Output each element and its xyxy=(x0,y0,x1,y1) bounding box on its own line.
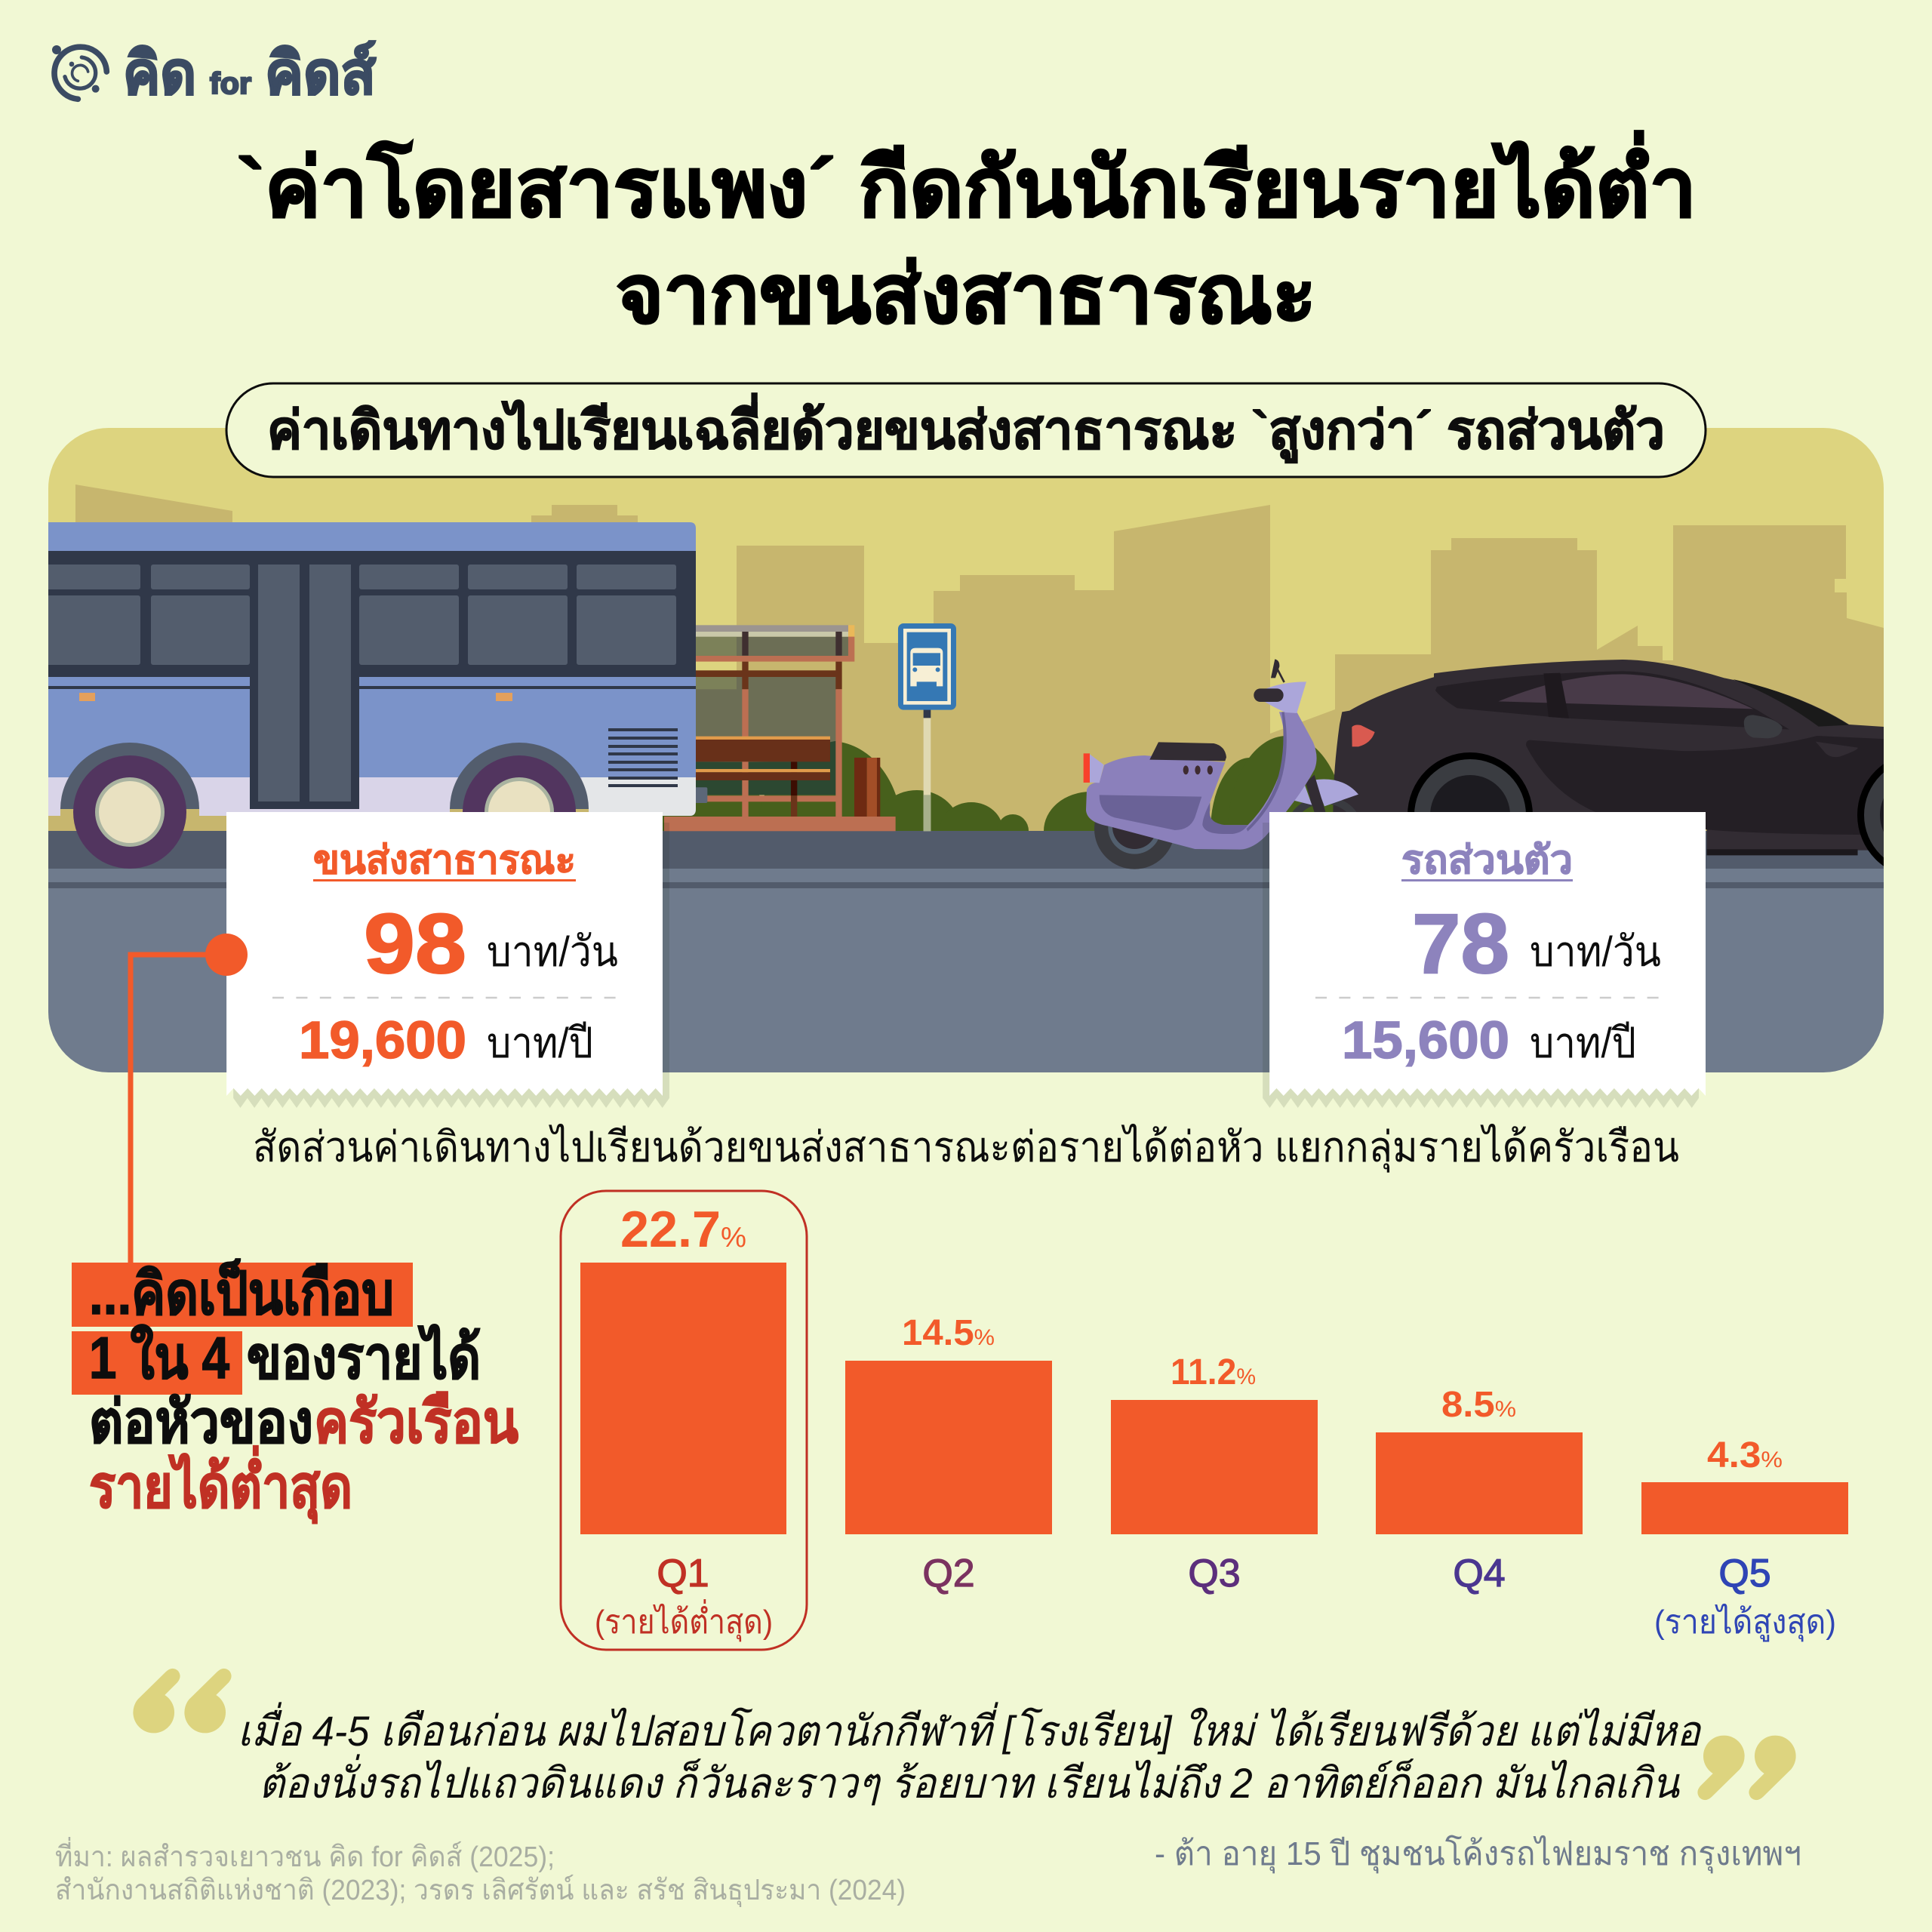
bar Q2 xyxy=(845,1313,1052,1595)
bar Q4: Q4 xyxy=(1453,1552,1506,1595)
yearly cost: 19,600 xyxy=(299,1011,466,1069)
bar Q2: Q2 xyxy=(922,1552,975,1595)
Q1 highlight frame xyxy=(561,1191,807,1650)
title: `ค่าโดยสารแพง´ กีดกันนักเรียนรายได้ต่ำ xyxy=(237,131,1697,233)
source note xyxy=(55,1837,906,1907)
bus rear wheel xyxy=(450,743,589,812)
quote text: เมื่อ 4-5 เดือนก่อน ผมไปสอบโควตานักกีฬาที่ [โรงเรียน] ใหม่ ได้เรียนฟรีด้วย แต่ไม่มีหอ xyxy=(238,1702,1702,1755)
bar Q5: 4.3% xyxy=(1707,1435,1783,1475)
connector from card to callout xyxy=(131,934,248,1268)
car xyxy=(1333,660,1884,866)
sky xyxy=(48,428,1884,734)
yearly cost xyxy=(1342,1011,1636,1069)
car main body xyxy=(1434,660,1887,855)
yearly cost: 15,600 xyxy=(1342,1011,1509,1069)
yearly cost xyxy=(299,1011,593,1069)
quote text xyxy=(238,1702,1702,1807)
callout xyxy=(72,1259,518,1524)
card: private vehicle cost xyxy=(1263,812,1706,1108)
bus body xyxy=(48,522,696,816)
card heading: ขนส่งสาธารณะ xyxy=(313,838,576,882)
daily cost: บาท/วัน xyxy=(487,928,618,975)
callout: ครัวเรือน xyxy=(314,1389,518,1455)
bar Q5: Q5 xyxy=(1718,1552,1771,1595)
car wheels xyxy=(1407,752,1533,812)
bar Q2: 14.5% xyxy=(902,1313,995,1353)
bushes xyxy=(663,736,1334,831)
title xyxy=(237,131,1697,340)
bus xyxy=(41,522,696,869)
bar Q3: 11.2% xyxy=(1171,1352,1256,1392)
callout: รายได้ต่ำสุด xyxy=(89,1445,352,1524)
logo wordmark: คิดส์ xyxy=(265,40,376,106)
daily cost xyxy=(364,897,618,991)
bus windows xyxy=(41,565,676,665)
car rear body xyxy=(1333,677,1434,812)
logo wordmark xyxy=(123,40,376,106)
yearly cost: บาท/ปี xyxy=(487,1019,593,1066)
chart heading: สัดส่วนค่าเดินทางไปเรียนด้วยขนส่งสาธารณะต่อรายได้ต่อหัว แยกกลุ่มรายได้ครัวเรือน xyxy=(253,1123,1679,1173)
card shadow over road xyxy=(1263,823,1699,1108)
bus vent xyxy=(608,728,678,787)
bar Q1: 22.7% xyxy=(620,1201,746,1258)
card sheet xyxy=(1269,812,1706,1096)
icon: closing quote mark xyxy=(1697,1736,1796,1800)
bar Q3: Q3 xyxy=(1188,1552,1241,1595)
yearly cost: บาท/ปี xyxy=(1530,1019,1636,1066)
pill heading: ค่าเดินทางไปเรียนเฉลี่ยด้วยขนส่งสาธารณะ `สูงกว่า´ รถส่วนตัว xyxy=(267,392,1665,463)
source note: สำนักงานสถิติแห่งชาติ (2023); วรดร เลิศรัตน์ และ สรัช สินธุประมา (2024) xyxy=(55,1874,906,1907)
city skyline xyxy=(48,485,1884,838)
icon: opening quote mark xyxy=(133,1669,232,1733)
road xyxy=(48,831,1884,1072)
bus side lights xyxy=(79,693,95,701)
quote attribution: - ต้า อายุ 15 ปี ชุมชนโค้งรถไฟยมราช กรุงเทพฯ xyxy=(1155,1835,1801,1874)
scooter xyxy=(1084,659,1360,869)
bus door xyxy=(250,677,359,809)
bus shelter xyxy=(664,625,896,831)
bar chart xyxy=(561,1191,1848,1650)
source note: ที่มา: ผลสำรวจเยาวชน คิด for คิดส์ (2025); xyxy=(55,1837,555,1873)
bar Q1: (รายได้ต่ำสุด) xyxy=(595,1598,773,1642)
callout: ของรายได้ xyxy=(247,1324,481,1391)
card sheet xyxy=(226,812,663,1096)
bus front wheel xyxy=(60,743,199,869)
bar Q4: 8.5% xyxy=(1441,1385,1516,1425)
daily cost: 98 xyxy=(364,897,466,991)
quote text: ต้องนั่งรถไปแถวดินแดง ก็วันละราวๆ ร้อยบาท เรียนไม่ถึง 2 อาทิตย์ก็ออก มันไกลเกิน xyxy=(259,1754,1681,1807)
logo wordmark: คิด xyxy=(123,40,196,106)
callout: ...คิดเป็นเกือบ xyxy=(89,1259,394,1327)
daily cost: 78 xyxy=(1412,897,1509,991)
icon: bus stop sign xyxy=(898,623,956,831)
logo: คิด for คิดส์ xyxy=(52,40,376,106)
callout: ต่อหัวของ xyxy=(89,1389,313,1455)
bar Q4 xyxy=(1376,1385,1583,1595)
pill heading xyxy=(226,383,1706,477)
bar Q5: (รายได้สูงสุด) xyxy=(1654,1603,1836,1642)
bar Q3 xyxy=(1111,1352,1318,1595)
icon: logo swirl xyxy=(52,45,106,99)
callout: 1 ใน 4 xyxy=(89,1324,229,1391)
daily cost xyxy=(1412,897,1661,991)
panel: street scene xyxy=(41,428,1932,1072)
card shadow over road xyxy=(233,823,669,1108)
daily cost: บาท/วัน xyxy=(1530,928,1661,975)
bar Q1 xyxy=(580,1201,786,1642)
logo wordmark: for xyxy=(210,67,251,100)
card heading: รถส่วนตัว xyxy=(1401,838,1573,882)
title: จากขนส่งสาธารณะ xyxy=(616,248,1316,340)
bar Q5 xyxy=(1641,1435,1848,1642)
card: public transport cost xyxy=(226,812,669,1108)
bar Q1: Q1 xyxy=(657,1552,709,1595)
